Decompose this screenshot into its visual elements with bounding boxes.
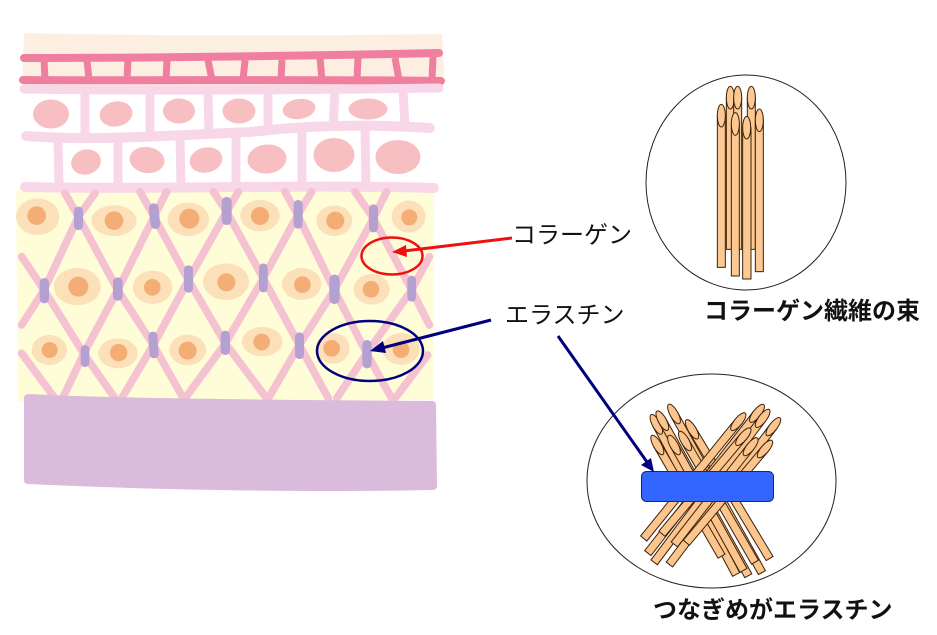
label: collagen: コラーゲン: [512, 222, 632, 249]
circle outline: [587, 374, 836, 588]
epidermis nuclei: [33, 97, 420, 178]
collagen fibres bundle: [717, 86, 763, 279]
label: elastin: エラスチン: [505, 302, 625, 329]
callout: elastin ring: [317, 321, 423, 381]
fibroblast cells: [16, 198, 426, 368]
arrow: elastin to junction: [558, 336, 654, 472]
crossed collagen fibres: [641, 402, 783, 578]
epidermis cell walls: [24, 88, 439, 188]
arrow: elastin on skin: [370, 320, 491, 353]
panel: collagen bundle circle: [646, 75, 846, 290]
heading: collagen bundle: コラーゲン繊維の束: [704, 298, 920, 325]
heading: elastin junction: つなぎめがエラスチン: [653, 596, 893, 624]
circle outline: [646, 75, 846, 290]
dermis fibre lattice: collagen, fibroblasts and elastin: [16, 192, 429, 398]
fibroblast nuclei: [27, 206, 417, 361]
blood vessel ladder: [23, 53, 441, 81]
panel: skin cross-section: [16, 33, 444, 491]
panel: elastin junction circle: [587, 374, 836, 588]
layer: beige top band: [22, 33, 444, 92]
collagen lattice: [22, 192, 429, 398]
layer: purple subcutis: [24, 394, 437, 491]
elastin band: [642, 472, 774, 502]
arrow: collagen: [392, 238, 512, 257]
callout: collagen ring: [362, 238, 422, 274]
elastin nodes: [40, 197, 416, 368]
layer: yellow dermis background: [16, 188, 434, 402]
